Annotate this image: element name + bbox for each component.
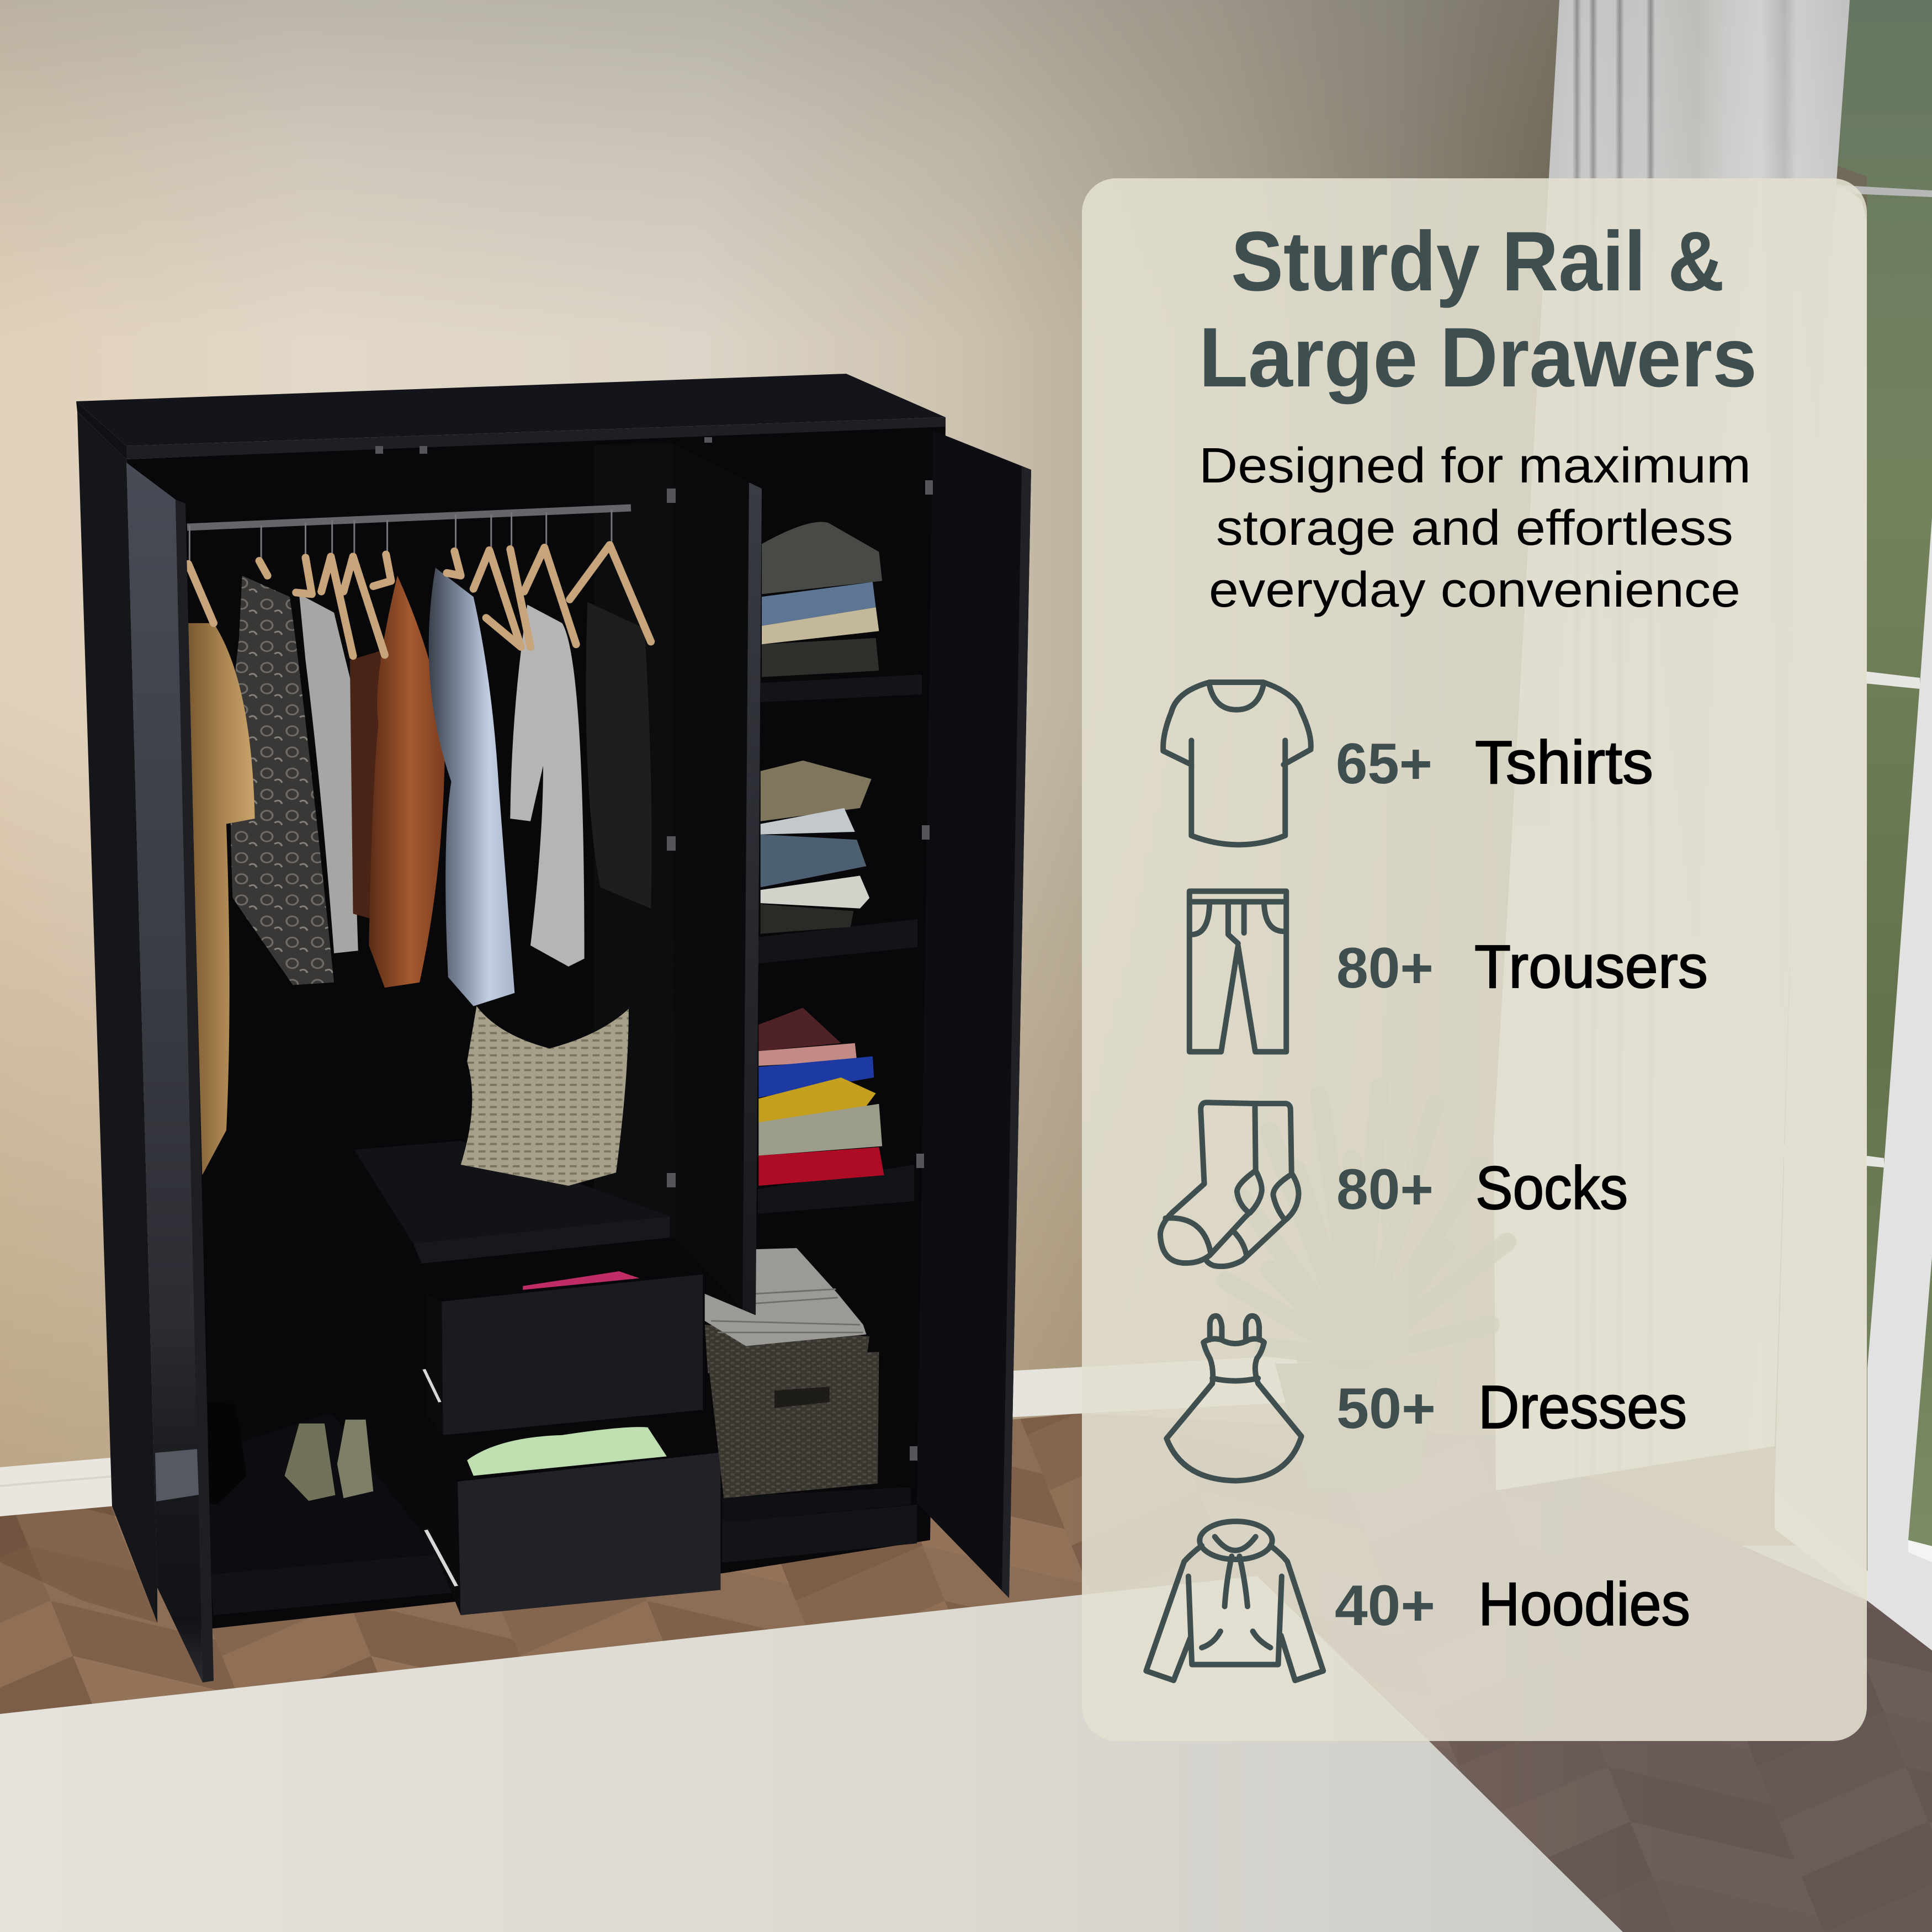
row: trousers bbox=[1190, 891, 1708, 1052]
right door bbox=[917, 431, 1031, 1598]
row: socks: Socks bbox=[1475, 1154, 1628, 1222]
row: dresses: Dresses bbox=[1478, 1373, 1687, 1441]
wood floor bbox=[0, 1413, 1932, 1932]
wall background bbox=[0, 0, 1932, 1546]
row: hoodies: Hoodies bbox=[1478, 1570, 1690, 1638]
crochet bag bbox=[461, 1006, 629, 1186]
row: tshirts: Tshirts bbox=[1475, 729, 1653, 797]
right compartment shelves bbox=[722, 675, 922, 1522]
folded clothes stack middle bbox=[761, 761, 872, 934]
inner dark jacket bbox=[350, 650, 385, 919]
icon: socks bbox=[1160, 1102, 1299, 1266]
door hinges bbox=[375, 437, 933, 1461]
folded blanket and wicker baskets bbox=[705, 1248, 879, 1498]
icon: dress bbox=[1166, 1316, 1302, 1480]
icon: hoodie bbox=[1146, 1521, 1323, 1680]
hanging clothes bbox=[188, 567, 652, 1175]
potted plant behind panel bbox=[1225, 1087, 1507, 1493]
hanging rail bbox=[187, 508, 631, 527]
plinths bbox=[208, 1413, 917, 1615]
row: tshirts bbox=[1163, 682, 1653, 845]
subtitle: Designed for maximum bbox=[1199, 438, 1751, 493]
row: tshirts: 65+ bbox=[1336, 732, 1432, 796]
row: trousers: 80+ bbox=[1336, 936, 1434, 1000]
light blue shirt bbox=[429, 567, 514, 1006]
left door bbox=[126, 463, 214, 1682]
row: dresses bbox=[1166, 1316, 1687, 1480]
row: socks bbox=[1160, 1102, 1628, 1266]
rug bbox=[0, 1576, 1623, 1932]
paisley shirt bbox=[231, 576, 334, 985]
ankle boots bbox=[208, 1402, 373, 1505]
title bbox=[1199, 214, 1757, 405]
wardrobe bbox=[76, 374, 1031, 1682]
center door bbox=[673, 443, 762, 1315]
tan coat bbox=[188, 623, 255, 1175]
dark blouse bbox=[586, 602, 652, 909]
center drawer pedestal bbox=[208, 1141, 879, 1615]
wooden hangers bbox=[188, 509, 651, 656]
folded clothes stack top bbox=[762, 522, 882, 677]
brown leather jacket bbox=[369, 576, 445, 988]
wardrobe top bbox=[76, 374, 946, 459]
baseboard bbox=[0, 1355, 1297, 1516]
subtitle bbox=[1199, 438, 1751, 618]
row: hoodies bbox=[1146, 1521, 1690, 1680]
wardrobe interior bbox=[126, 425, 946, 1628]
window view and frame bbox=[1766, 0, 1932, 1650]
row: socks: 80+ bbox=[1336, 1158, 1434, 1222]
subtitle: everyday convenience bbox=[1209, 562, 1740, 618]
upper drawer bbox=[424, 1271, 703, 1435]
title: Sturdy Rail & bbox=[1231, 214, 1724, 309]
light grey shirt bbox=[299, 594, 375, 953]
folded clothes stack bottom bbox=[758, 1008, 884, 1186]
grey shirt bbox=[510, 604, 585, 967]
title: Large Drawers bbox=[1199, 310, 1757, 405]
icon: trousers bbox=[1190, 891, 1286, 1052]
info panel bbox=[1082, 178, 1867, 1741]
subtitle: storage and effortless bbox=[1216, 501, 1733, 556]
row: trousers: Trousers bbox=[1474, 933, 1708, 1001]
left outer side panel bbox=[77, 412, 157, 1623]
row: hoodies: 40+ bbox=[1335, 1574, 1435, 1638]
icon: t-shirt bbox=[1163, 682, 1311, 845]
lower drawer bbox=[426, 1427, 720, 1615]
upper back shelf shading bbox=[594, 443, 675, 1238]
sheer curtain bbox=[1494, 0, 1850, 1490]
row: dresses: 50+ bbox=[1336, 1377, 1436, 1441]
